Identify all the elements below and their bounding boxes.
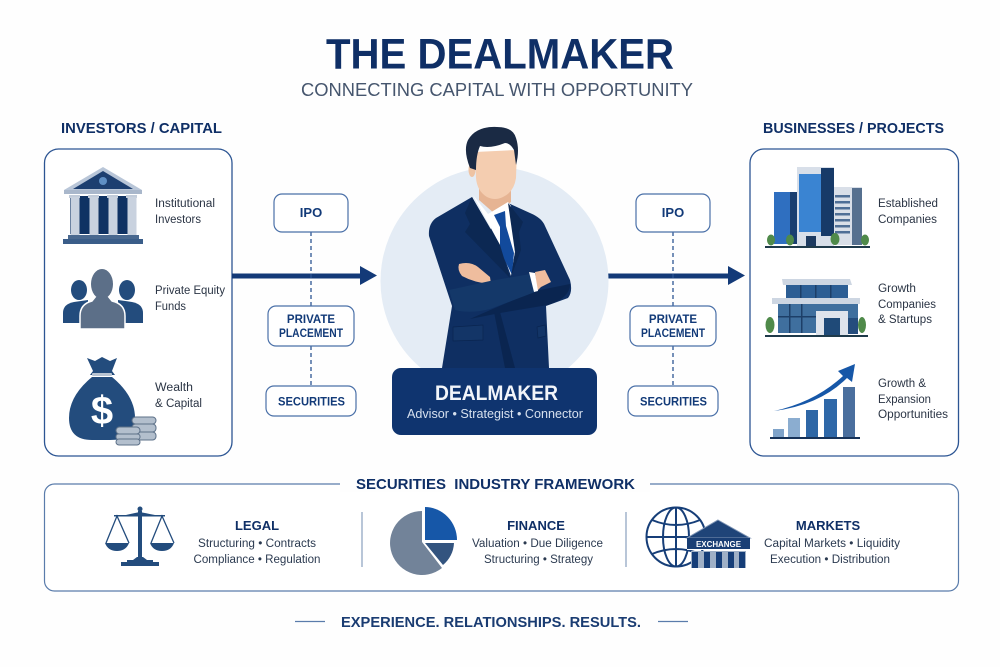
neck <box>479 180 511 214</box>
right hand <box>535 270 551 291</box>
icon: globe and exchange: EXCHANGE <box>696 539 741 549</box>
label: growth companies and startups: & Startups <box>878 314 932 326</box>
label: growth companies and startups <box>878 283 936 326</box>
label: private equity funds: Private Equity <box>155 285 225 297</box>
jacket split <box>494 312 515 368</box>
badge: dealmaker: Advisor • Strategist • Connector <box>407 407 583 421</box>
icon: money bag and coins <box>69 357 156 445</box>
box: IPO: IPO <box>300 205 322 220</box>
figure: dealmaker <box>429 127 571 368</box>
label: growth and expansion opportunities: Expansion <box>878 394 931 406</box>
heading: framework: SECURITIES INDUSTRY FRAMEWORK <box>356 476 635 493</box>
box: securities <box>628 386 718 416</box>
deal types: left <box>266 194 356 416</box>
icon: growth chart <box>770 364 860 439</box>
box: securities: SECURITIES <box>278 394 345 408</box>
badge: dealmaker <box>392 368 597 435</box>
label: wealth and capital: Wealth <box>155 382 193 394</box>
box: IPO <box>274 194 348 232</box>
text: legal: Structuring • Contracts <box>198 538 316 550</box>
icon: office towers <box>765 167 870 248</box>
shirt <box>473 195 515 276</box>
text: legal: Compliance • Regulation <box>194 554 320 566</box>
box: private placement: PRIVATE <box>649 314 697 326</box>
lapels <box>465 197 510 278</box>
icon: growth company building <box>765 279 868 337</box>
suit body <box>429 197 571 368</box>
panel: investors <box>44 149 232 456</box>
icon: private equity people <box>63 269 143 329</box>
left hand <box>458 263 491 284</box>
text: markets: MARKETS <box>796 518 860 533</box>
text: legal: LEGAL <box>235 518 279 533</box>
icon: scales of justice <box>105 506 174 566</box>
ear <box>468 163 476 177</box>
label: private equity funds: Funds <box>155 301 186 313</box>
heading: businesses: BUSINESSES / PROJECTS <box>763 120 944 137</box>
connectors <box>311 232 673 386</box>
label: wealth and capital <box>155 382 202 410</box>
panel: businesses <box>750 149 958 456</box>
label: institutional investors: Institutional <box>155 198 215 210</box>
label: growth and expansion opportunities: Growth & <box>878 378 926 390</box>
label: growth and expansion opportunities: Opportunities <box>878 409 948 421</box>
footer tagline: EXPERIENCE. RELATIONSHIPS. RESULTS. <box>341 614 641 631</box>
label: established companies: Companies <box>878 214 937 226</box>
heading: investors: INVESTORS / CAPITAL <box>61 120 222 137</box>
box: private placement <box>268 306 354 346</box>
icon: institution bank <box>63 167 143 244</box>
panel: securities industry framework <box>44 476 958 591</box>
deal types: right <box>628 194 718 416</box>
chart: pie <box>390 507 457 575</box>
label: established companies <box>878 198 938 226</box>
cuff <box>529 272 538 292</box>
box: private placement: PLACEMENT <box>641 328 705 340</box>
box: IPO <box>636 194 710 232</box>
icon: money bag and coins: $ <box>91 389 113 433</box>
text: finance: Valuation • Due Diligence <box>472 538 603 550</box>
box: securities <box>266 386 356 416</box>
box: IPO: IPO <box>662 205 684 220</box>
tie <box>494 211 514 275</box>
text: markets: Capital Markets • Liquidity <box>764 538 900 550</box>
box: securities: SECURITIES <box>640 394 707 408</box>
hair <box>466 127 518 170</box>
arrow: investors to dealmaker <box>232 266 377 285</box>
label: wealth and capital: & Capital <box>155 398 202 410</box>
text: finance: FINANCE <box>507 518 565 533</box>
label: growth and expansion opportunities <box>878 378 948 421</box>
text: finance: Structuring • Strategy <box>484 554 593 566</box>
label: established companies: Established <box>878 198 938 210</box>
box: private placement: PLACEMENT <box>279 328 343 340</box>
badge: dealmaker: DEALMAKER <box>435 382 558 405</box>
box: private placement <box>630 306 716 346</box>
background circle <box>380 167 608 395</box>
subtitle: CONNECTING CAPITAL WITH OPPORTUNITY <box>301 79 693 100</box>
arrow: dealmaker to businesses <box>608 266 745 285</box>
label: growth companies and startups: Growth <box>878 283 916 295</box>
text: markets <box>764 518 900 566</box>
text: finance <box>472 518 603 566</box>
text: markets: Execution • Distribution <box>770 554 890 566</box>
label: institutional investors <box>155 198 215 226</box>
icon: globe and exchange <box>646 508 750 568</box>
folded forearm <box>449 274 535 312</box>
box: private placement: PRIVATE <box>287 314 335 326</box>
text: legal <box>194 518 320 566</box>
title: THE DEALMAKER <box>326 30 674 78</box>
forearm shadow <box>470 284 570 319</box>
face <box>475 150 517 199</box>
label: private equity funds <box>155 285 225 313</box>
label: growth companies and startups: Companies <box>878 299 936 311</box>
pockets <box>453 325 483 341</box>
label: institutional investors: Investors <box>155 214 201 226</box>
